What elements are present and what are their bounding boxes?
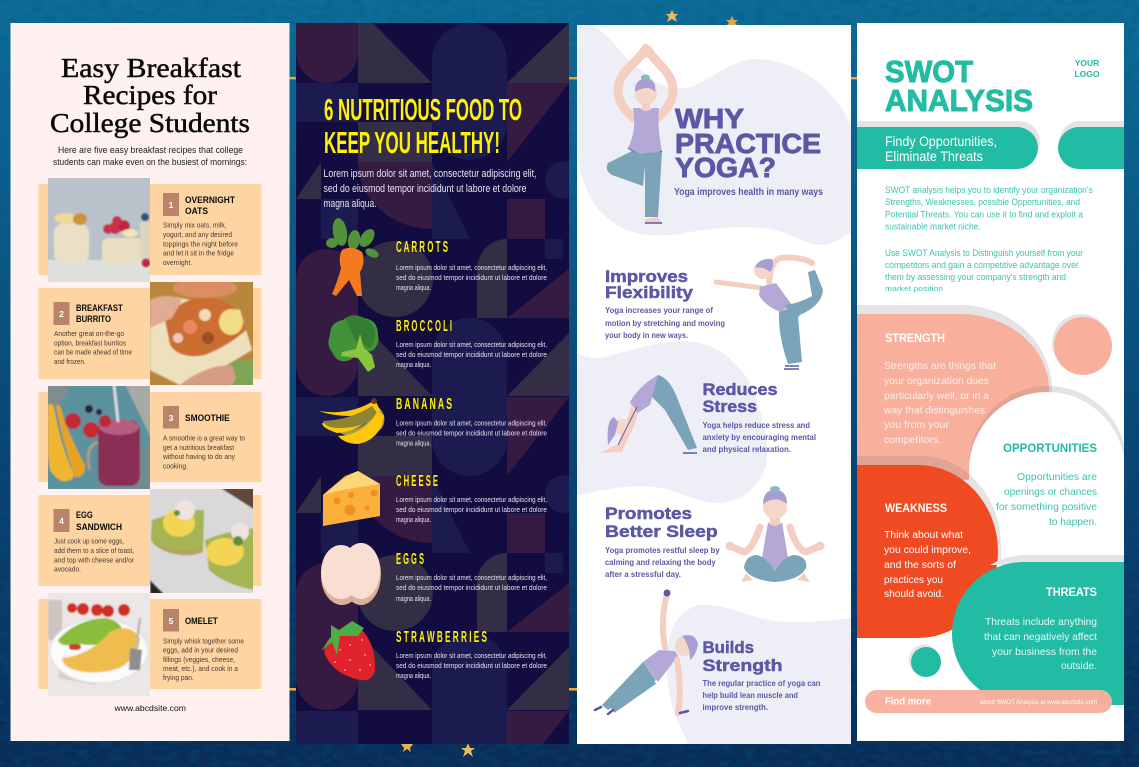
intro paragraph 1: Potential Threats. You can use it to find and exploit a bbox=[885, 210, 1083, 220]
opportunities text: Opportunities are bbox=[1017, 471, 1097, 483]
text: and physical relaxation. bbox=[702, 444, 791, 454]
banner text: Findy Opportunities, bbox=[885, 133, 997, 149]
description: magna aliqua. bbox=[396, 362, 431, 369]
opportunities text bbox=[996, 441, 1097, 528]
section: better sleep bbox=[605, 486, 824, 582]
text bbox=[605, 545, 720, 579]
opportunities shape bbox=[969, 386, 1124, 480]
text: Yoga helps reduce stress and bbox=[702, 420, 810, 430]
recipe text: option, breakfast burritos bbox=[54, 338, 126, 348]
recipe heading bbox=[76, 510, 122, 533]
recipe text: meat, etc.), and cook in a bbox=[163, 664, 239, 673]
recipe text: and let it sit in the fridge bbox=[163, 248, 234, 258]
intro paragraph 1 bbox=[885, 185, 1093, 232]
intro text: magna aliqua. bbox=[324, 198, 376, 210]
intro paragraph 1: Strengths, Weaknesses, possible Opportunities, and bbox=[885, 197, 1080, 207]
title: SWOT bbox=[885, 54, 973, 89]
food item: cheese bbox=[323, 471, 547, 526]
figure: downward dog bbox=[600, 375, 697, 453]
photo: oats jars bbox=[46, 176, 152, 284]
strength text: competitors. bbox=[884, 434, 941, 446]
recipe heading: SMOOTHIE bbox=[185, 413, 230, 424]
weakness shape bbox=[857, 456, 1001, 638]
photo: burrito bbox=[148, 278, 255, 387]
recipe heading: OVERNIGHT bbox=[185, 195, 235, 206]
text: after a stressful day. bbox=[605, 569, 681, 579]
description: sed do eiusmod tempor incididunt ut labore et dolore bbox=[396, 430, 547, 438]
recipe text: eggs, add in your desired bbox=[163, 646, 238, 654]
recipe 1: overnight oats: 1 bbox=[169, 200, 174, 210]
website: www.abcdsite.com bbox=[113, 703, 186, 713]
strength text: your organization does bbox=[884, 375, 989, 387]
recipe text: cooking. bbox=[163, 462, 188, 470]
recipe heading: SANDWICH bbox=[76, 522, 122, 533]
intro text: students can make even on the busiest of mornings: bbox=[53, 157, 247, 168]
weakness text bbox=[884, 501, 971, 600]
text bbox=[702, 420, 816, 454]
recipe heading: EGG bbox=[76, 510, 93, 521]
logo placeholder: YOUR bbox=[1075, 58, 1099, 68]
recipe 3: smoothie bbox=[38, 384, 262, 491]
number badge bbox=[163, 609, 179, 632]
threats text: Threats include anything bbox=[985, 616, 1097, 628]
recipe text: avocado. bbox=[54, 564, 81, 574]
number badge bbox=[163, 193, 179, 216]
recipe text bbox=[54, 536, 134, 574]
description bbox=[396, 497, 547, 524]
description: Lorem ipsum dolor sit amet, consectetur adipiscing elit, bbox=[396, 497, 547, 504]
weakness text: should avoid. bbox=[884, 588, 944, 600]
title: College Students bbox=[50, 108, 250, 138]
recipe text: A smoothie is a great way to bbox=[163, 434, 245, 442]
recipe 2: breakfast burrito: 2 bbox=[59, 309, 64, 319]
weakness text: WEAKNESS bbox=[885, 501, 947, 515]
text: improve strength. bbox=[702, 702, 768, 712]
recipe text: and frozen. bbox=[54, 357, 86, 366]
recipe text: toppings the night before bbox=[163, 240, 238, 248]
text bbox=[702, 678, 820, 712]
strength text: way that distinguishes bbox=[883, 404, 985, 416]
food item: bananas bbox=[319, 396, 547, 448]
intro text: sed do eiusmod tempor incididunt ut labore et dolore bbox=[324, 183, 527, 195]
title: ANALYSIS bbox=[885, 83, 1033, 118]
threats text: outside. bbox=[1061, 660, 1097, 672]
recipe text: can be made ahead of time bbox=[54, 348, 132, 356]
threats shape bbox=[952, 555, 1124, 705]
call to action bar: Find more bbox=[885, 696, 931, 708]
logo placeholder: LOGO bbox=[1074, 69, 1100, 79]
section: reduces stress bbox=[600, 375, 816, 454]
recipe heading bbox=[76, 303, 123, 325]
description: magna aliqua. bbox=[396, 673, 431, 680]
title bbox=[324, 92, 522, 160]
weakness text: Think about what bbox=[884, 529, 963, 541]
recipe 4: egg sandwich bbox=[38, 487, 262, 595]
intro paragraph 2 bbox=[885, 248, 1083, 293]
intro text: Lorem ipsum dolor sit amet, consectetur adipiscing elit, bbox=[324, 168, 536, 180]
opportunities text: for something positive bbox=[996, 501, 1097, 513]
heading bbox=[605, 504, 718, 541]
heading: Improves bbox=[605, 267, 688, 286]
food item: strawberries bbox=[321, 621, 547, 680]
icon: broccoli bbox=[328, 315, 378, 372]
description: sed do eiusmod tempor incididunt ut labore et dolore bbox=[396, 275, 547, 282]
intro paragraph 2: market position bbox=[885, 284, 943, 293]
recipe 2: breakfast burrito bbox=[38, 278, 262, 387]
strength text: Strengths are things that bbox=[884, 360, 996, 372]
heading bbox=[605, 267, 694, 302]
icon: strawberry bbox=[321, 621, 375, 680]
weakness text: you could improve, bbox=[884, 544, 971, 556]
number badge bbox=[54, 302, 70, 325]
recipe 1: overnight oats bbox=[38, 176, 262, 284]
text: The regular practice of yoga can bbox=[702, 678, 820, 688]
text: Yoga increases your range of bbox=[605, 305, 713, 315]
text: Yoga promotes restful sleep by bbox=[605, 545, 720, 555]
food item: broccoli bbox=[328, 315, 547, 372]
recipe 5: omelet bbox=[38, 591, 262, 698]
description bbox=[396, 342, 547, 369]
description: magna aliqua. bbox=[396, 440, 431, 448]
section: builds strength bbox=[595, 590, 820, 714]
description: Lorem ipsum dolor sit amet, consectetur adipiscing elit, bbox=[396, 653, 547, 660]
recipe text: add them to a slice of toast, bbox=[54, 546, 134, 555]
photo: avocado toast bbox=[148, 487, 255, 595]
recipe 4: egg sandwich: 4 bbox=[59, 516, 64, 526]
food item: eggs bbox=[321, 543, 547, 605]
icon: carrot bbox=[326, 217, 380, 296]
geometric pattern bbox=[296, 23, 583, 744]
figure: lotus pose bbox=[726, 486, 824, 582]
recipe text: get a nutritious breakfast bbox=[163, 443, 234, 452]
food item: cheese: C H E E S E bbox=[396, 473, 438, 490]
title bbox=[50, 53, 250, 138]
threats text: your business from the bbox=[992, 646, 1097, 658]
background blobs bbox=[577, 25, 851, 744]
text: anxiety by encouraging mental bbox=[702, 432, 816, 442]
photo: omelet plate bbox=[46, 591, 152, 698]
title: WHY bbox=[675, 103, 744, 134]
description: magna aliqua. bbox=[396, 517, 431, 524]
call to action bar bbox=[865, 690, 1112, 713]
description bbox=[396, 653, 547, 680]
opportunities text: openings or chances bbox=[1004, 486, 1097, 498]
strength accent circle bbox=[1052, 314, 1112, 375]
title: YOGA? bbox=[675, 152, 776, 183]
title bbox=[675, 103, 821, 183]
weakness text: and the sorts of bbox=[884, 559, 956, 571]
icon: bananas bbox=[319, 398, 384, 444]
panel: breakfast recipes bbox=[10, 23, 290, 741]
intro text bbox=[53, 145, 247, 168]
recipe text bbox=[163, 220, 238, 267]
heading bbox=[702, 380, 778, 416]
recipe text: overnight. bbox=[163, 258, 192, 267]
intro paragraph 1: sustainable market niche. bbox=[885, 222, 981, 232]
strength text: STRENGTH bbox=[885, 331, 945, 345]
intro paragraph 2: Use SWOT Analysis to Distinguish yourself from your bbox=[885, 248, 1083, 258]
recipe text: Just cook up some eggs, bbox=[54, 536, 124, 546]
number badge bbox=[163, 406, 179, 428]
intro text bbox=[324, 168, 536, 210]
banner text: Eliminate Threats bbox=[885, 148, 983, 164]
heading bbox=[702, 638, 782, 675]
description: sed do eiusmod tempor incididunt ut labore et dolore bbox=[396, 507, 547, 514]
gold connector lines and stars bbox=[289, 10, 858, 757]
heading: Better Sleep bbox=[605, 522, 718, 541]
opportunities text: to happen. bbox=[1049, 516, 1097, 528]
recipe text bbox=[163, 636, 244, 682]
recipe text: Simply mix oats, milk, bbox=[163, 220, 226, 230]
recipe text: yogurt, and any desired bbox=[163, 230, 232, 239]
logo placeholder bbox=[1074, 58, 1100, 79]
figure: side plank bbox=[595, 590, 698, 714]
heading: Flexibility bbox=[605, 283, 694, 302]
title: PRACTICE bbox=[675, 128, 821, 159]
strength shape bbox=[857, 305, 1052, 480]
title: Easy Breakfast bbox=[61, 53, 242, 83]
description bbox=[396, 420, 547, 448]
recipe 5: omelet: 5 bbox=[169, 616, 174, 626]
title: 6 NUTRITIOUS FOOD TO bbox=[324, 92, 522, 127]
intro paragraph 1: SWOT analysis helps you to identify your organization's bbox=[885, 185, 1093, 195]
intro paragraph 2: competitors and gain a competitive advantage over bbox=[885, 260, 1079, 270]
heading: Strength bbox=[702, 656, 782, 675]
recipe heading: BURRITO bbox=[76, 314, 111, 325]
SWOT shapes bbox=[857, 305, 1127, 705]
recipe heading bbox=[185, 195, 235, 217]
opportunities text: OPPORTUNITIES bbox=[1003, 441, 1097, 455]
number badge bbox=[54, 509, 70, 532]
heading: Reduces bbox=[702, 380, 778, 399]
food item: broccoli: B R O C C O L I bbox=[396, 318, 452, 335]
subtitle: Yoga improves health in many ways bbox=[674, 187, 823, 198]
food item: eggs: E G G S bbox=[396, 551, 424, 568]
recipe text: frying pan. bbox=[163, 673, 194, 682]
photo: smoothie bbox=[46, 384, 152, 491]
label: B A N A N A S bbox=[396, 396, 452, 413]
threats text: THREATS bbox=[1046, 585, 1097, 599]
recipe text: Another great on-the-go bbox=[54, 329, 124, 338]
recipe heading: OATS bbox=[185, 206, 209, 217]
description bbox=[396, 575, 547, 603]
weakness text: practices you bbox=[884, 574, 943, 586]
food item: carrots: C A R R O T S bbox=[396, 239, 448, 256]
icon: eggs bbox=[321, 543, 381, 605]
figure: dancer pose bbox=[716, 258, 823, 369]
threats text: that can negatively affect bbox=[984, 631, 1097, 643]
description: magna aliqua. bbox=[396, 285, 431, 292]
icon: cheese bbox=[323, 471, 380, 526]
section: improves flexibility bbox=[605, 258, 823, 369]
title: KEEP YOU HEALTHY! bbox=[324, 125, 500, 160]
recipe text: Simply whisk together some bbox=[163, 636, 244, 646]
recipe text: without having to do any bbox=[162, 452, 235, 461]
description: Lorem ipsum dolor sit amet, consectetur adipiscing elit, bbox=[396, 342, 547, 349]
recipe text bbox=[162, 434, 245, 470]
strength text: you from your bbox=[884, 419, 949, 431]
strength text bbox=[883, 331, 996, 446]
description: Lorem ipsum dolor sit amet, consectetur adipiscing elit, bbox=[396, 575, 547, 582]
description bbox=[396, 265, 547, 292]
text bbox=[605, 305, 725, 340]
banner text bbox=[885, 133, 997, 164]
teal accent circle bbox=[908, 644, 941, 677]
title bbox=[885, 54, 1033, 118]
intro paragraph 2: them by assessing your company's strength and bbox=[885, 272, 1066, 282]
recipe text: fillings (veggies, cheese, bbox=[163, 655, 235, 664]
recipe heading: BREAKFAST bbox=[76, 303, 123, 314]
banner bbox=[857, 121, 1124, 169]
recipe 3: smoothie: 3 bbox=[169, 413, 174, 423]
description: magna aliqua. bbox=[396, 596, 431, 603]
figure: tree pose bbox=[607, 44, 673, 223]
description: sed do eiusmod tempor incididunt ut labore et dolore bbox=[396, 352, 547, 359]
call to action bar: about SWOT Analysis at www.abcdsite.com bbox=[980, 699, 1097, 706]
heading: Builds bbox=[702, 638, 754, 657]
title: Recipes for bbox=[83, 80, 217, 110]
description: sed do eiusmod tempor incididunt ut labore et dolore bbox=[396, 663, 547, 670]
text: motion by stretching and moving bbox=[605, 318, 725, 328]
strength text: particularly well, or in a bbox=[884, 390, 989, 402]
panel: yoga bbox=[577, 25, 851, 744]
panel: nutritious food bbox=[296, 23, 583, 744]
description: sed do eiusmod tempor incididunt ut labore et dolore bbox=[396, 585, 547, 592]
recipe text bbox=[54, 329, 132, 366]
panel: SWOT analysis bbox=[857, 23, 1127, 741]
intro text: Here are five easy breakfast recipes that college bbox=[58, 145, 243, 156]
description: Lorem ipsum dolor sit amet, consectetur adipiscing elit, bbox=[396, 265, 547, 272]
recipe heading: OMELET bbox=[185, 616, 218, 627]
description: Lorem ipsum dolor sit amet, consectetur adipiscing elit, bbox=[396, 420, 547, 428]
text: help build lean muscle and bbox=[702, 690, 798, 700]
food item: carrots bbox=[326, 217, 547, 296]
label: S T R A W B E R R I E S bbox=[396, 629, 487, 646]
text: your body in new ways. bbox=[605, 330, 688, 340]
text: calming and relaxing the body bbox=[605, 557, 716, 567]
recipe text: and top with cheese and/or bbox=[54, 556, 134, 564]
heading: Promotes bbox=[605, 504, 692, 523]
heading: Stress bbox=[702, 397, 757, 416]
threats text bbox=[984, 585, 1097, 672]
